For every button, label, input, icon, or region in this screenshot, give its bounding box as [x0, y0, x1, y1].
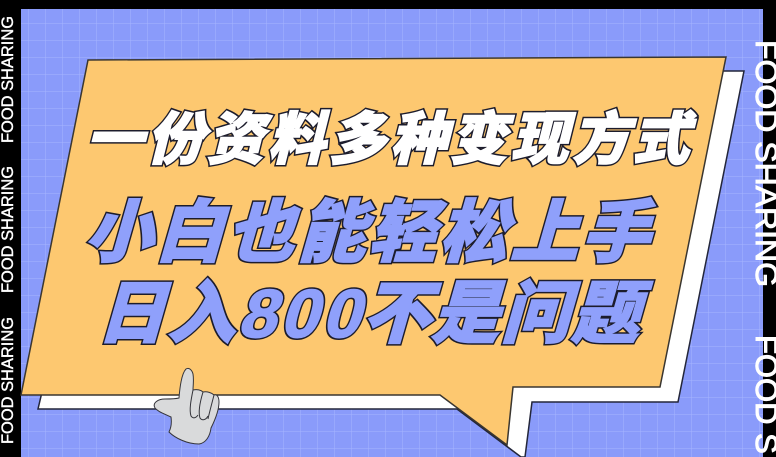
left side vertical text — [0, 16, 17, 444]
right side vertical text — [749, 40, 776, 454]
heading line 1: 一份资料多种变现方式 — [83, 108, 702, 172]
heading line 1: 一份资料多种变现方式 — [83, 108, 702, 172]
heading line 2: 小白也能轻松上手 — [80, 194, 667, 271]
white shadow of speech bubble — [38, 71, 744, 457]
pointing hand icon — [154, 368, 219, 444]
yellow speech bubble — [21, 57, 726, 445]
heading line 3: 日入800不是问题 — [93, 275, 657, 352]
heading line 2: 小白也能轻松上手 — [80, 194, 667, 271]
heading line 3: 日入800不是问题 — [93, 275, 657, 352]
